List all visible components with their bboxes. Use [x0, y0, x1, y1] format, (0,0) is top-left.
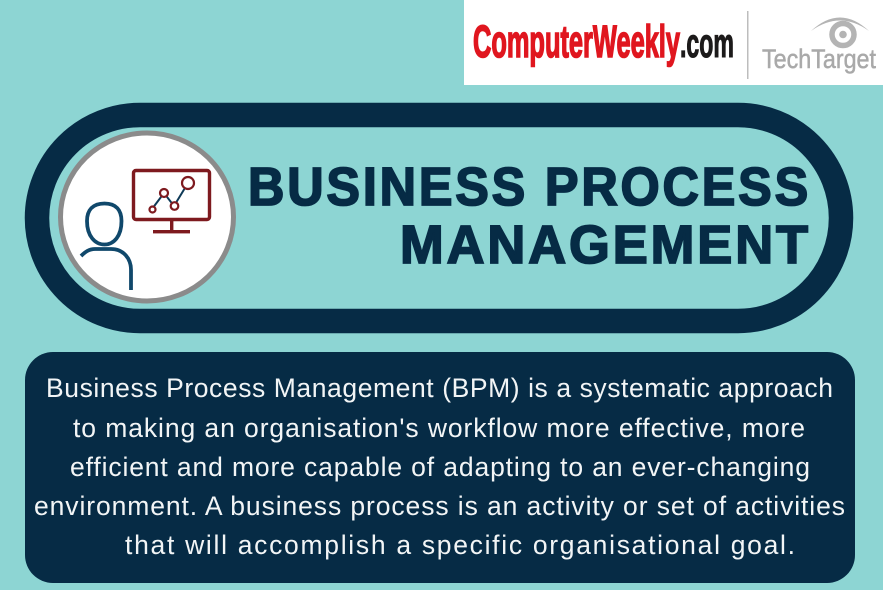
description text: Business Process Management (BPM) is a systematic approach — [46, 373, 833, 403]
logo divider — [747, 11, 748, 79]
description text: that will accomplish a specific organisational goal. — [125, 530, 795, 560]
icon: monitor with line chart — [134, 170, 210, 233]
description text: efficient and more capable of adapting to an ever-changing — [70, 452, 810, 482]
logo: TechTarget — [762, 18, 876, 74]
title: MANAGEMENT — [400, 215, 811, 275]
title — [248, 157, 811, 275]
description text: environment. A business process is an activity or set of activities — [34, 491, 845, 521]
logo: ComputerWeekly.com: ComputerWeekly — [473, 16, 680, 67]
logo: ComputerWeekly.com: .com — [680, 20, 734, 66]
title: BUSINESS PROCESS — [248, 157, 811, 217]
description text — [34, 373, 845, 560]
icon: person — [81, 204, 131, 290]
description panel — [25, 352, 855, 583]
icon circle: person with chart monitor — [60, 133, 234, 301]
description text: to making an organisation's workflow more effective, more — [73, 413, 805, 443]
title pill frame — [37, 115, 841, 321]
logo banner — [464, 0, 883, 85]
